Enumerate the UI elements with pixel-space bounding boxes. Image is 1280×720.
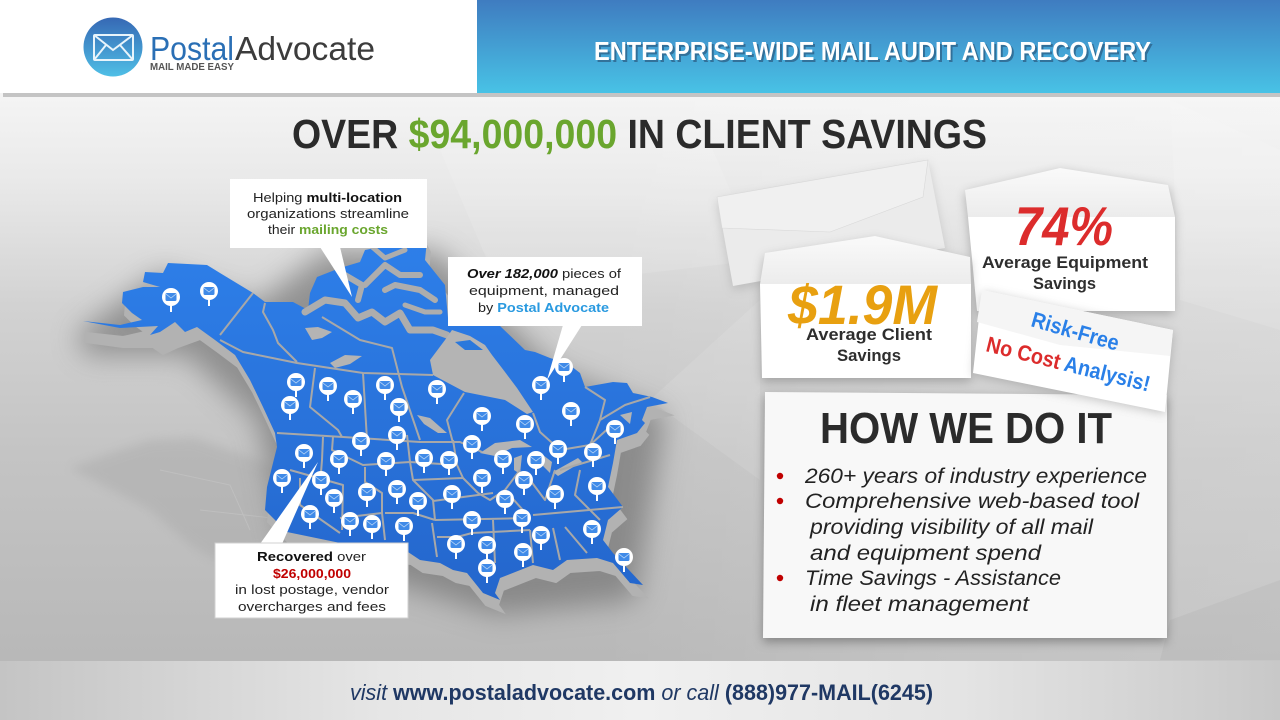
74 percent label bbox=[982, 253, 1148, 293]
callout: multi-location bbox=[230, 179, 427, 297]
panel: how we do it bbox=[763, 392, 1167, 642]
1.9M label: Average Client bbox=[806, 325, 932, 344]
header underline bbox=[3, 93, 1280, 97]
map extrusion bbox=[86, 240, 671, 612]
bullet list bbox=[777, 465, 1147, 616]
74 percent label: Savings bbox=[1033, 274, 1096, 293]
logo wordmark: Postal bbox=[150, 30, 234, 67]
callout: recovered bbox=[215, 462, 408, 618]
1.9M label: Savings bbox=[837, 346, 901, 365]
header title: ENTERPRISE-WIDE MAIL AUDIT AND RECOVERY bbox=[596, 38, 1153, 68]
footer contact text: visit www.postaladvocate.com or call (888)977-MAIL(6245) bbox=[350, 680, 933, 705]
header: white logo area bbox=[0, 0, 477, 93]
arctic channels bbox=[305, 245, 447, 335]
risk-free text bbox=[984, 307, 1153, 396]
callout: recovered: Recovered over bbox=[257, 549, 367, 564]
logo: Advocate bbox=[235, 30, 375, 67]
1.9M value: $1.9M bbox=[787, 273, 938, 336]
envelope: 1.9M bbox=[760, 236, 971, 382]
callout: multi-location: their mailing costs bbox=[268, 222, 388, 237]
envelope: 74 percent bbox=[965, 168, 1175, 314]
panel heading: HOW WE DO IT bbox=[820, 404, 1112, 453]
callout: equipment managed: Over 182,000 pieces of bbox=[467, 266, 621, 281]
map reflection bbox=[70, 438, 290, 560]
header title: ENTERPRISE-WIDE MAIL AUDIT AND RECOVERY bbox=[594, 36, 1151, 66]
callout: multi-location: Helping multi-location bbox=[253, 190, 402, 205]
callout: recovered: in lost postage, vendor bbox=[235, 582, 390, 597]
74 percent label: Average Equipment bbox=[982, 253, 1148, 272]
envelope: back decorative bbox=[717, 160, 945, 290]
risk-free text: Risk-Free bbox=[1029, 307, 1122, 356]
callout: equipment managed: equipment, managed bbox=[469, 283, 619, 298]
logo: MAIL MADE EASY bbox=[150, 62, 234, 73]
74 percent value: 74% bbox=[1015, 195, 1113, 257]
1.9M label bbox=[806, 325, 932, 365]
callout: recovered: overcharges and fees bbox=[238, 599, 387, 614]
logo envelope icon bbox=[94, 35, 133, 60]
callout: equipment managed: by Postal Advocate bbox=[478, 300, 609, 315]
map of North America bbox=[76, 228, 671, 615]
header: blue banner bbox=[477, 0, 1280, 94]
envelope: risk-free bbox=[973, 290, 1173, 414]
callout: multi-location: organizations streamline bbox=[247, 206, 409, 221]
southampton island bbox=[455, 340, 483, 350]
inland lakes bbox=[305, 327, 632, 476]
main title: OVER $94,000,000 IN CLIENT SAVINGS bbox=[292, 111, 987, 157]
logo bbox=[84, 18, 375, 76]
map pins bbox=[162, 282, 633, 583]
hudson bay bbox=[430, 330, 533, 414]
footer band bbox=[0, 661, 1280, 720]
callout: equipment managed bbox=[448, 257, 642, 380]
bullet list: Time Savings - Assistance bbox=[805, 567, 1061, 590]
bullet list: in fleet management bbox=[810, 593, 1030, 616]
bullet list: providing visibility of all mail bbox=[809, 516, 1094, 539]
bullet list: 260+ years of industry experience bbox=[804, 465, 1147, 488]
bullet list: Comprehensive web-based tool bbox=[805, 490, 1140, 513]
risk-free text: No Cost Analysis! bbox=[984, 332, 1153, 396]
map land bbox=[83, 228, 668, 600]
bullet list: and equipment spend bbox=[810, 542, 1043, 565]
map shadow bbox=[76, 250, 666, 615]
province and state borders bbox=[220, 293, 650, 563]
callout: recovered: $26,000,000 bbox=[273, 566, 351, 581]
